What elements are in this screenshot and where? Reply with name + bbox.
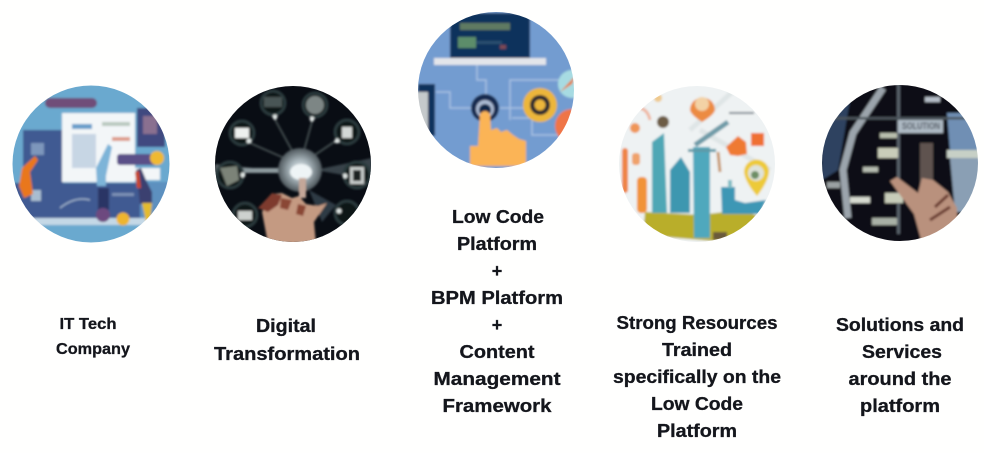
label: Solutions and Services around the platform: platform [860, 396, 940, 416]
icon: low code touch circle [418, 12, 574, 168]
label: Digital Transformation: Digital [256, 316, 316, 336]
label: Strong Resources Trained specifically on the Low Code Platform: Trained [662, 340, 732, 360]
column: Solutions and Services [820, 83, 980, 416]
label: Strong Resources Trained specifically on the Low Code Platform: Strong Resources [616, 313, 778, 333]
icon: solution touch screen circle: SOLUTION [902, 121, 940, 131]
column: Digital Transformation [213, 84, 373, 364]
label: Low Code Platform + BPM Platform + Content Management Framework: Low Code [452, 207, 544, 227]
label: Strong Resources Trained specifically on the Low Code Platform: Platform [657, 421, 737, 441]
icon: digital network and hand circle [213, 84, 373, 244]
label: Low Code Platform + BPM Platform + Content Management Framework: + [492, 261, 502, 281]
column: IT Tech Company [10, 84, 172, 358]
label: IT Tech Company [56, 316, 130, 358]
label: Strong Resources Trained specifically on the Low Code Platform [613, 313, 781, 441]
label: Low Code Platform + BPM Platform + Content Management Framework: BPM Platform [431, 288, 563, 308]
icon: city buildings circle [617, 84, 777, 245]
label: Solutions and Services around the platform [836, 315, 964, 416]
icon: solution touch screen circle [820, 83, 980, 243]
label: Strong Resources Trained specifically on the Low Code Platform: Low Code [651, 394, 743, 414]
label: IT Tech Company: Company [56, 341, 130, 358]
column: Low Code Platform [418, 12, 574, 412]
label: IT Tech Company: IT Tech [60, 316, 116, 333]
label: Low Code Platform + BPM Platform + Content Management Framework: Platform [457, 234, 537, 254]
label: Low Code Platform + BPM Platform + Content Management Framework [431, 207, 563, 416]
label: Solutions and Services around the platform: Services [862, 342, 942, 362]
label: Digital Transformation: Transformation [214, 344, 360, 364]
label: Low Code Platform + BPM Platform + Content Management Framework: Framework [442, 396, 553, 416]
label: Solutions and Services around the platform: around the [848, 369, 952, 389]
label: Solutions and Services around the platform: Solutions and [836, 315, 964, 335]
label: Low Code Platform + BPM Platform + Content Management Framework: Content [460, 342, 535, 362]
label: Low Code Platform + BPM Platform + Content Management Framework: Management [434, 369, 560, 389]
label: Strong Resources Trained specifically on the Low Code Platform: specifically on the [613, 367, 781, 387]
label: Digital Transformation [214, 316, 360, 364]
column: Strong Resources [613, 84, 781, 441]
label: Low Code Platform + BPM Platform + Content Management Framework: + [492, 315, 502, 335]
icon: IT tech illustration circle [10, 84, 172, 244]
